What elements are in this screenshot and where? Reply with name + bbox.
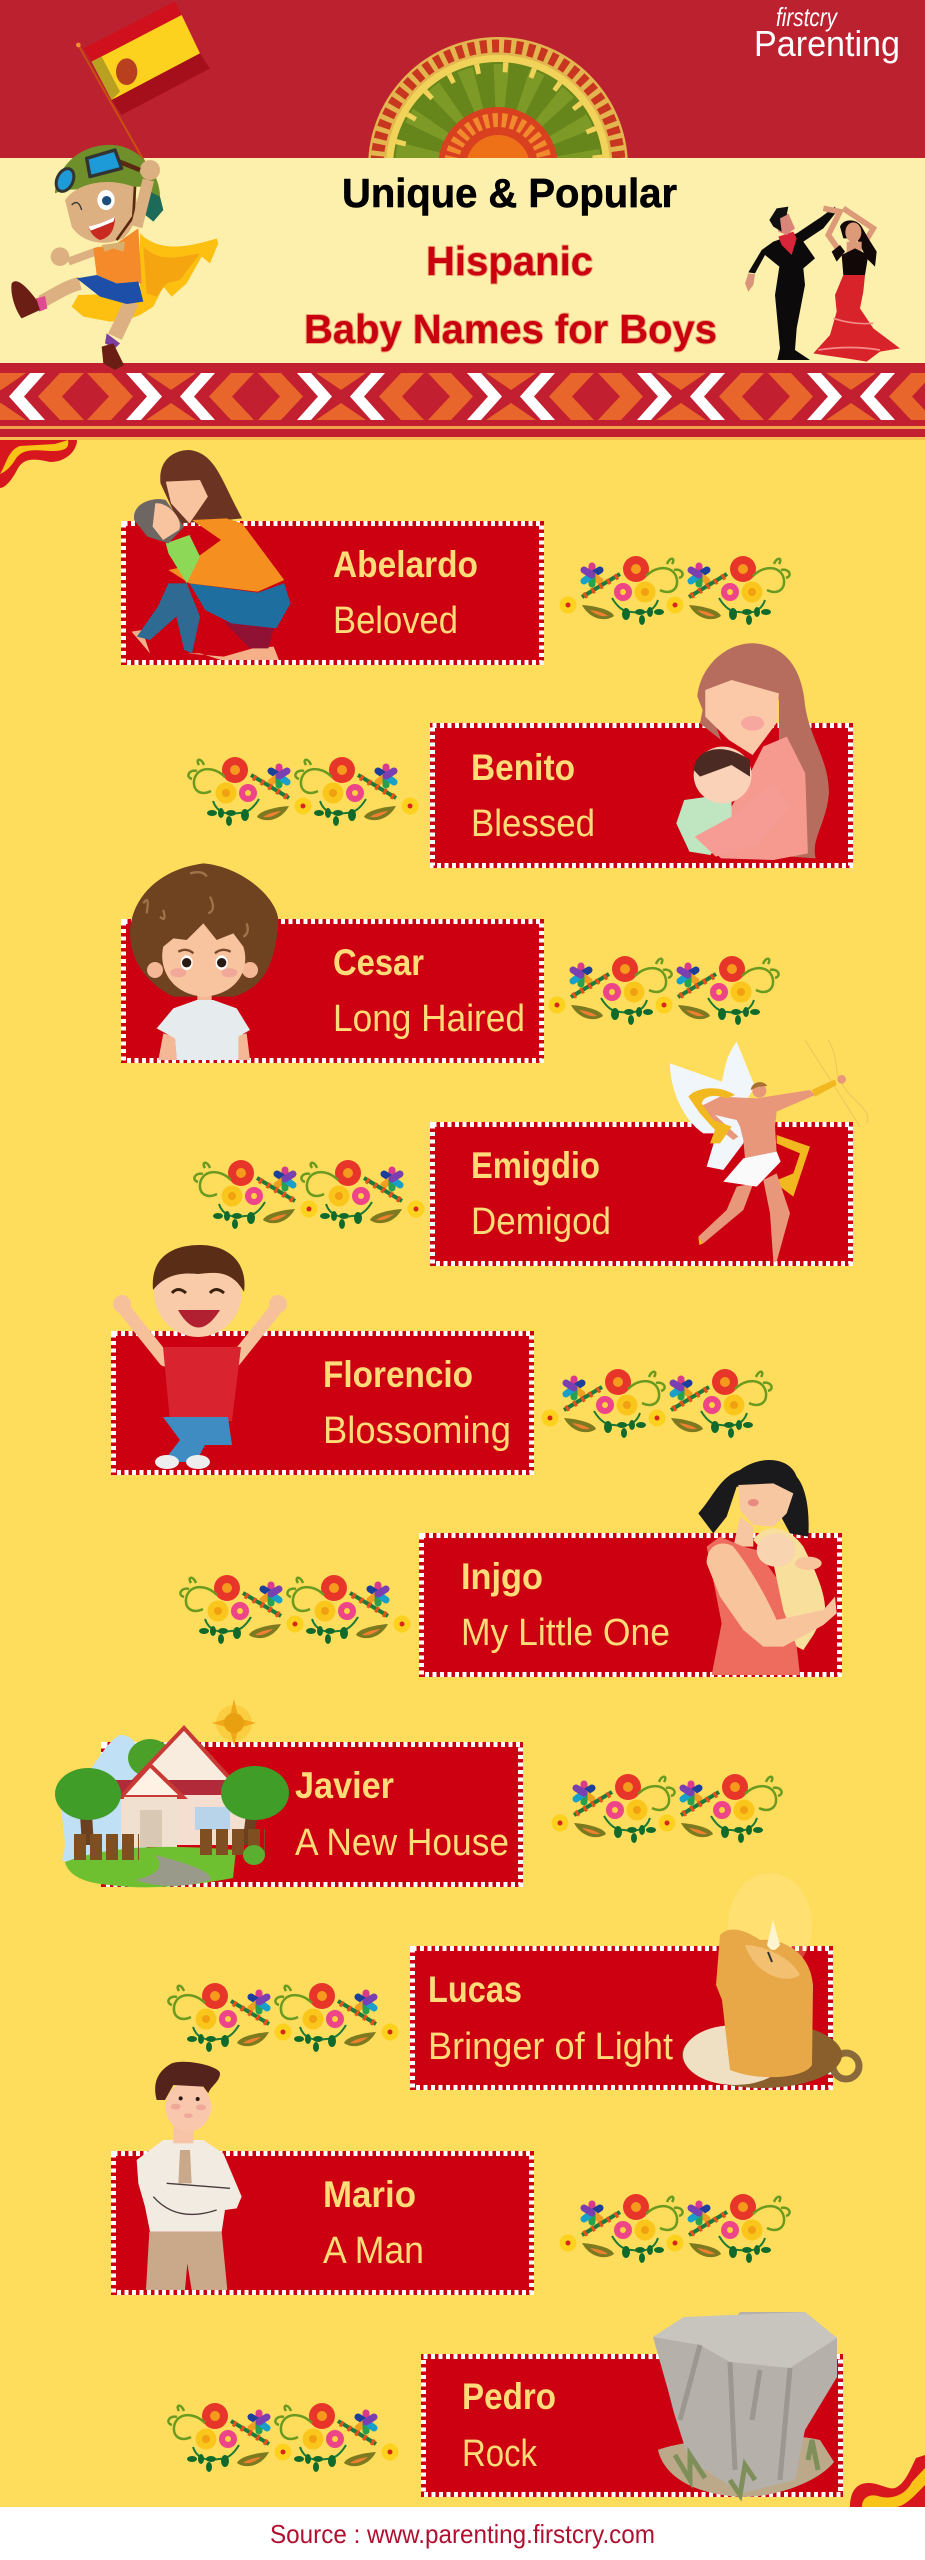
flower band: row 10: [168, 2403, 398, 2472]
title panel: [0, 158, 925, 364]
name: Emigdio: [471, 1145, 600, 1186]
illustration: boy with cape: [11, 145, 218, 370]
flower band: row 1: [560, 556, 790, 625]
name: Injgo: [461, 1556, 543, 1597]
illustration: rock: [653, 2312, 837, 2497]
logo: Parenting: Parenting: [754, 23, 900, 64]
meaning: Bringer of Light: [428, 2026, 673, 2068]
header band: [0, 0, 925, 160]
wave decoration: bottom right: [850, 2455, 925, 2507]
flower band: row 5: [542, 1369, 772, 1438]
meaning: Beloved: [333, 600, 458, 642]
name: Javier: [295, 1765, 394, 1806]
illustration: cupid: [670, 1040, 868, 1262]
name: Lucas: [428, 1969, 522, 2010]
meaning: Demigod: [471, 1201, 611, 1243]
title line 1: Unique & Popular: [342, 170, 677, 216]
panel: Mario: [111, 2062, 534, 2295]
flower band: row 3: [548, 956, 779, 1025]
meaning: A New House: [295, 1822, 509, 1864]
meaning: My Little One: [461, 1612, 670, 1654]
illustration: cheering boy: [113, 1245, 287, 1469]
illustration: candle: [682, 1873, 859, 2088]
name: Benito: [471, 747, 575, 788]
illustration: Spanish flag: [76, 2, 210, 183]
card: [101, 1742, 523, 1887]
illustration: mother hugging child: [132, 450, 291, 660]
illustration: mother holding baby: [676, 643, 829, 860]
card: [121, 919, 544, 1063]
title line 3: Baby Names for Boys: [304, 306, 717, 352]
name: Pedro: [462, 2376, 556, 2417]
flower band: row 9: [560, 2194, 790, 2263]
illustration: sun: [212, 1699, 256, 1746]
man dancer: [745, 207, 837, 360]
flower band: row 4: [194, 1160, 424, 1229]
panel: Pedro: [421, 2312, 843, 2497]
card: [121, 521, 544, 665]
meaning: Long Haired: [333, 998, 525, 1040]
flower band: row 8: [168, 1983, 398, 2052]
flower band: row 7: [552, 1774, 782, 1843]
panel: Benito: [430, 643, 853, 868]
card: [421, 2354, 843, 2497]
illustration: curly haired boy: [130, 863, 278, 1060]
card: [430, 1122, 853, 1266]
panel: Florencio: [111, 1245, 534, 1475]
title: [304, 170, 717, 352]
panel: Javier: [55, 1699, 523, 1887]
source credit: Source : www.parenting.firstcry.com: [270, 2519, 655, 2549]
card: [430, 723, 853, 868]
illustration: house with trees: [55, 1728, 289, 1887]
name: Abelardo: [333, 544, 478, 585]
flower band: row 6: [180, 1575, 410, 1644]
name: Cesar: [333, 942, 424, 983]
card: [111, 2151, 534, 2295]
footer panel: [0, 2507, 925, 2560]
panel: Emigdio: [430, 1040, 868, 1266]
card: [419, 1533, 842, 1677]
panel: Cesar: [121, 863, 544, 1063]
tribal pattern band: [0, 363, 925, 440]
illustration: man with crossed arms: [137, 2062, 242, 2290]
panel: Lucas: [410, 1873, 859, 2090]
illustration: mother with newborn: [698, 1460, 837, 1675]
meaning: Blessed: [471, 803, 595, 845]
meaning: A Man: [323, 2230, 424, 2272]
meaning: Rock: [462, 2433, 538, 2475]
card: [111, 1331, 534, 1475]
panel: Injgo: [419, 1460, 842, 1677]
decorative fan: [368, 37, 628, 297]
panel: Abelardo: [121, 450, 544, 665]
name: Mario: [323, 2174, 416, 2215]
name: Florencio: [323, 1354, 473, 1395]
title line 2: Hispanic: [426, 238, 593, 284]
flower band: row 2: [188, 757, 418, 826]
wave decoration: top left: [0, 440, 77, 488]
woman dancer: [813, 208, 900, 362]
logo: [754, 2, 900, 64]
card: [410, 1946, 833, 2090]
meaning: Blossoming: [323, 1410, 511, 1452]
illustration: flamenco dancers: [745, 207, 900, 362]
logo: firstcry: firstcry: [776, 2, 839, 32]
